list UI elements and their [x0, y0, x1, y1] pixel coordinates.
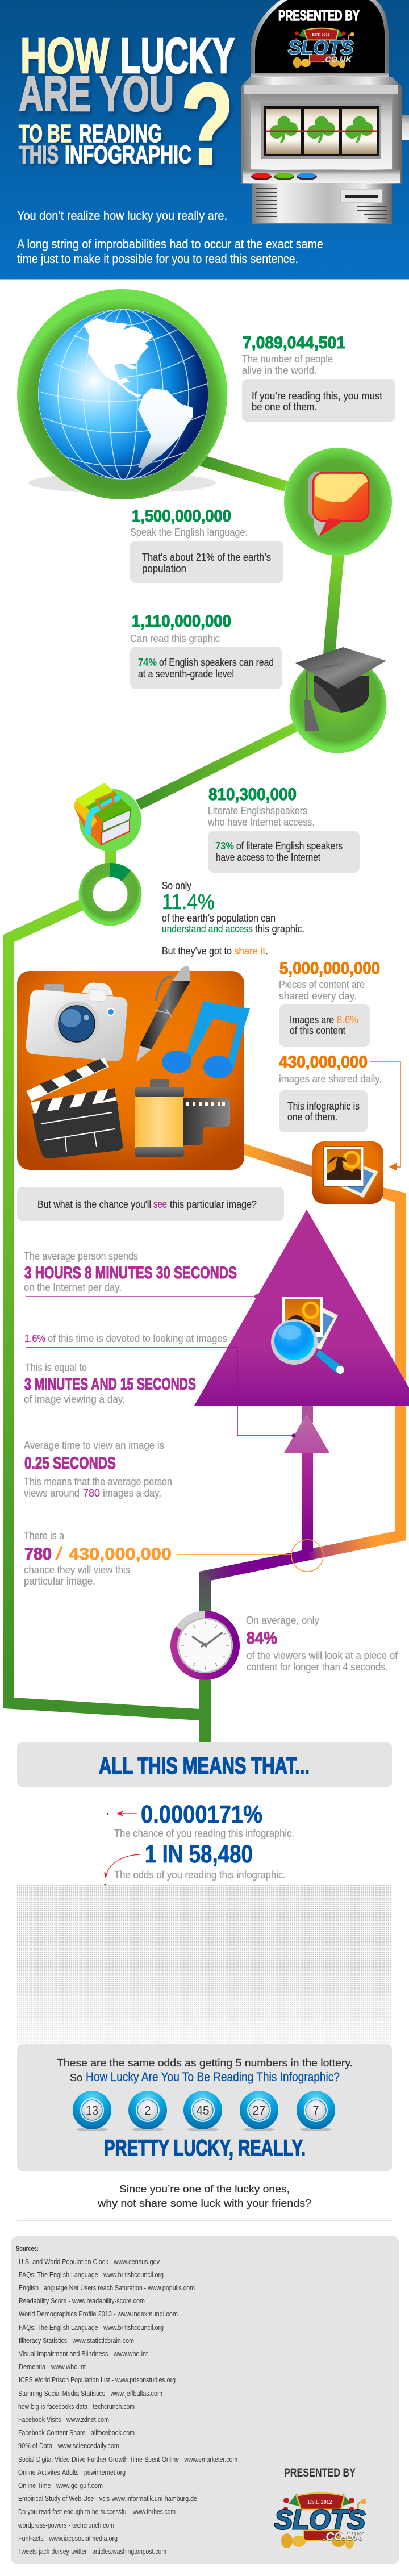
stat: image viewing time: 3 MINUTES AND 15 SECONDS	[24, 1375, 196, 1394]
panel: all this means that: ALL THIS MEANS THAT...	[99, 1752, 310, 1779]
stat: time online: on the Internet per day.	[24, 1282, 122, 1293]
intro text: A long string of improbabilities had to occur at the exact same	[17, 237, 323, 251]
lottery ball 2: 2	[144, 2103, 151, 2118]
sources list: Readability Score - www.readability-score.com	[19, 2296, 145, 2305]
stat: odds: The odds of you reading this infographic.	[114, 1869, 286, 1881]
icon: slots logo footer	[274, 2493, 366, 2549]
title: READING	[79, 120, 162, 148]
stat: 11.4 percent: this graphic.	[255, 923, 304, 935]
sources list: wordpress-powers - techcrunch.com	[18, 2521, 114, 2529]
callout: 74 percent: 74%	[138, 657, 157, 668]
panel: lottery comparison: These are the same odds as getting 5 numbers in the lottery.	[57, 2057, 353, 2069]
callout: images 8.6 percent: Images are	[290, 1014, 334, 1026]
callout: this infographic	[279, 1090, 368, 1132]
orange path: right side down	[383, 1187, 406, 1540]
title: ?	[181, 59, 234, 189]
icon: stack of books	[74, 783, 141, 851]
clover reel 1	[270, 116, 298, 143]
sources list: Online-Activites-Adults - pewinternet.org	[18, 2468, 126, 2477]
closing text: Since you’re one of the lucky ones,	[119, 2183, 290, 2195]
callout: one of them: If you’re reading this, you must	[252, 390, 382, 402]
icon: slots logo footer: SLOTS	[274, 2505, 365, 2535]
panel: lottery comparison: PRETTY LUCKY, REALLY.	[104, 2136, 306, 2161]
donut chart: clock 84 percent	[170, 1611, 240, 1680]
handle	[402, 115, 409, 140]
stat: chance percentage	[114, 1800, 294, 1839]
stat: english speakers	[130, 507, 248, 538]
stat: average view time: 780	[83, 1487, 100, 1499]
stat: shared content: shared every day.	[279, 990, 357, 1002]
lottery ball 13: 13	[86, 2103, 98, 2118]
callout: 21 percent	[130, 541, 283, 583]
sources list: Online Time - www.go-gulf.com	[18, 2481, 103, 2490]
panel: sources	[11, 2236, 399, 2564]
stat: can read graphic: Can read this graphic	[130, 633, 220, 644]
stat: 780 over 430,000,000: 780	[24, 1545, 52, 1564]
stat: world population: 7,089,044,501	[243, 334, 345, 352]
panel: lottery comparison: So	[70, 2072, 82, 2083]
lottery ball 27: 27	[252, 2103, 266, 2118]
orange and purple path: across	[199, 1531, 406, 1581]
buttons	[251, 173, 317, 180]
icon: graduation cap	[290, 647, 386, 753]
arrow: curved to dot	[104, 1854, 140, 1886]
callout: 21 percent: population	[142, 563, 186, 574]
stat: image viewing time: This is equal to	[25, 1362, 87, 1373]
path: down to clock	[199, 1572, 211, 1614]
lottery ball 2	[128, 2091, 167, 2131]
sources list	[18, 2257, 237, 2556]
stat: average view time: This means that the average person	[24, 1476, 172, 1487]
stat: 780 over 430,000,000: 430,000,000	[69, 1545, 172, 1564]
purple arrow: triangle and stem	[194, 1210, 409, 1552]
stat: 84 percent: 84%	[247, 1629, 277, 1648]
stat: 11.4 percent: share it	[234, 945, 265, 957]
sources list: Stunning Social Media Statistics - www.jeffbullas.com	[18, 2389, 162, 2398]
callout: 74 percent: at a seventh-grade level	[138, 668, 234, 680]
stat: 780 over 430,000,000: chance they will view this	[24, 1564, 130, 1575]
sources list: 90% of Data - www.sciencedaily.com	[18, 2441, 119, 2450]
sources list: ICPS World Prison Population List - www.prisonstudies.org	[19, 2375, 176, 2384]
icon: pen	[136, 966, 190, 1062]
icon: slots logo: .CO.UK	[323, 55, 352, 64]
presented by footer label: PRESENTED BY	[284, 2466, 356, 2479]
arrow: images to icon	[370, 1061, 400, 1170]
stat: shared content	[279, 959, 380, 1002]
green path: trunk to summary box	[199, 1676, 211, 1743]
callout: chance of seeing image: But what is the chance you'll	[37, 1199, 151, 1210]
sources list: Social-Digital-Video-Drive-Further-Growth-Time-Spent-Online - www.emarketer.com	[18, 2455, 237, 2464]
orange path: media panel to image icon	[244, 1144, 312, 1177]
title: TO BE	[19, 120, 72, 148]
lottery ball 45: 45	[197, 2103, 209, 2118]
stat: time online	[24, 1251, 237, 1293]
lottery ball 7	[297, 2091, 335, 2131]
stat: odds: 1 IN 58,480	[145, 1840, 253, 1868]
stat: 11.4 percent: But they've got to	[162, 945, 232, 957]
sources list: Empirical Study of Web Use - vsis-www.informatik.uni-hamburg.de	[18, 2494, 197, 2503]
callout: 74 percent: of English speakers can read	[159, 657, 274, 668]
intro text	[17, 209, 323, 266]
callout: 73 percent: 73%	[215, 840, 234, 852]
sources list: Visual Impairment and Blindness - www.who.int	[19, 2349, 148, 2358]
stat: 11.4 percent: .	[265, 945, 268, 957]
title: THIS	[19, 141, 59, 169]
stat: 780 over 430,000,000: There is a	[24, 1530, 65, 1541]
sources list: Do-you-read-fast-enough-to-be-successful - www.forbes.com	[18, 2507, 176, 2516]
stat: time online: The average person spends	[24, 1251, 138, 1262]
stat: average view time: views around	[24, 1487, 80, 1499]
panel: lottery comparison	[17, 2044, 392, 2171]
sources list: Illiteracy Statistics - www.statisticbrain.com	[19, 2336, 134, 2345]
stat: internet access: who have Internet access.	[207, 816, 315, 828]
callout: one of them: be one of them.	[252, 401, 317, 412]
callout: one of them	[242, 379, 395, 422]
connector: image viewing	[26, 1348, 295, 1437]
stat: percent of time on images: 1.6%	[24, 1333, 45, 1344]
sources list: World Demographics Profile 2013 - www.indexmundi.com	[19, 2310, 178, 2318]
stat: images shared	[279, 1053, 382, 1085]
stat: chance percentage: The chance of you reading this infographic.	[114, 1828, 294, 1839]
sources list: Facebook Visits - www.zdnet.com	[18, 2415, 109, 2424]
sources list: U.S. and World Population Clock - www.census.gov	[19, 2257, 160, 2266]
sources list: Facebook Content Share - allfacebook.com	[18, 2428, 135, 2437]
stat: images shared: images are shared daily.	[279, 1073, 382, 1085]
stat: image viewing time	[24, 1362, 196, 1405]
stat: chance percentage: 0.0000171%	[141, 1800, 262, 1828]
stat: average view time: Average time to view an image is	[24, 1440, 164, 1451]
stat: internet access: Literate Englishspeakers	[208, 805, 307, 816]
icon: film roll	[135, 1079, 230, 1157]
stat: can read graphic	[130, 612, 231, 644]
callout: images 8.6 percent: of this content	[290, 1025, 345, 1036]
stat: shared content: Pieces of content are	[279, 979, 365, 990]
stat: average view time: 0.25 SECONDS	[24, 1454, 116, 1473]
clover reel 3	[345, 116, 373, 143]
icon: magnifier over photo	[271, 1297, 344, 1374]
title: ARE YOU	[19, 66, 174, 122]
sources list: how-big-is-facebooks-data - techcrunch.com	[18, 2402, 135, 2411]
icon: slot machine	[241, 0, 409, 224]
sources list: FAQs: The English Language - www.britishcouncil.org	[19, 2270, 164, 2279]
stat: 11.4 percent: So only	[162, 880, 191, 891]
panel: all this means that	[17, 1742, 392, 1787]
lottery ball 7: 7	[312, 2103, 319, 2118]
callout line and ring	[177, 1540, 323, 1572]
title: LUCKY	[120, 28, 235, 84]
icon: slots logo: SLOTS	[288, 37, 353, 59]
callout: 73 percent	[208, 831, 360, 873]
header panel	[0, 0, 409, 280]
stat: 11.4 percent: 11.4%	[162, 890, 215, 914]
stat: can read graphic: 1,110,000,000	[132, 612, 231, 631]
intro text: You don’t realize how lucky you really are.	[17, 209, 227, 223]
stat: 11.4 percent: understand and access	[162, 923, 253, 935]
stat: time online: 3 HOURS 8 MINUTES 30 SECONDS	[24, 1264, 237, 1282]
stat: 84 percent: On average, only	[246, 1615, 319, 1626]
stat: 84 percent: content for longer than 4 seconds.	[247, 1661, 388, 1673]
panel: shared media icons	[17, 966, 250, 1170]
stat: images shared: 430,000,000	[279, 1053, 368, 1072]
panel: lottery comparison: How Lucky Are You To Be Reading This Infographic?	[86, 2070, 340, 2084]
stat: 780 over 430,000,000	[24, 1530, 172, 1587]
icon: music note	[162, 1001, 250, 1078]
stat: internet access	[207, 785, 315, 828]
callout: 73 percent: have access to the Internet	[216, 852, 320, 863]
sources list: English Language Net Users reach Saturation - www.populis.com	[19, 2283, 195, 2292]
callout: chance of seeing image: this particular image?	[170, 1199, 257, 1210]
callout: this infographic: This infographic is	[287, 1101, 360, 1112]
icon: clapperboard	[26, 1058, 123, 1158]
icon: globe	[17, 289, 227, 499]
stat: 11.4 percent	[162, 880, 304, 957]
lottery ball 13	[73, 2091, 111, 2131]
callout: images 8.6 percent	[279, 1004, 370, 1047]
callout: this infographic: one of them.	[287, 1111, 337, 1123]
stat: internet access: 810,300,000	[208, 785, 297, 804]
stat: 780 over 430,000,000: /	[55, 1543, 63, 1564]
green path: left trunk	[3, 899, 199, 1720]
sources heading: Sources:	[16, 2244, 39, 2253]
sources list: Tweets-jack-dorsey-twitter - articles.washingtonpost.com	[18, 2547, 166, 2556]
icon: slots logo footer: .CO.UK	[323, 2531, 364, 2543]
sources list: FunFacts - www.iacpsocialmedia.org	[18, 2534, 118, 2542]
stat: 780 over 430,000,000: particular image.	[24, 1575, 95, 1587]
closing text	[97, 2183, 311, 2209]
intro text: time just to make it possible for you to read this sentence.	[17, 252, 298, 266]
stat: percent of time on images: of this time is devoted to looking at images	[48, 1333, 227, 1344]
stat: average view time	[24, 1440, 172, 1499]
stat: average view time: images a day.	[103, 1487, 161, 1499]
donut chart: 11.4 percent	[78, 862, 142, 926]
stat: 84 percent: of the viewers will look at a piece of	[247, 1650, 398, 1661]
icon: slots logo: EST. 2012	[312, 32, 330, 37]
closing text: why not share some luck with your friends?	[97, 2198, 311, 2209]
icon: camera	[25, 982, 128, 1062]
green path: globe to speech bubble	[199, 456, 288, 491]
dot field: one in 58,480	[17, 1885, 391, 2044]
stat: world population: alive in the world.	[242, 365, 317, 376]
stat: world population: The number of people	[242, 353, 333, 365]
callout: images 8.6 percent: 8.6%	[337, 1014, 358, 1026]
green path: speech bubble to cap	[323, 554, 344, 653]
presented by label: PRESENTED BY	[278, 8, 360, 24]
connector: time online	[26, 1294, 259, 1299]
stat: world population	[242, 334, 345, 376]
stat: 84 percent	[246, 1615, 398, 1673]
lottery ball 27	[240, 2091, 278, 2131]
icon: speech bubble	[284, 448, 392, 556]
arrow: to tiny dot	[107, 1811, 137, 1816]
stat: odds	[114, 1840, 286, 1881]
callout: 74 percent	[130, 647, 282, 689]
icon: slots logo footer: EST. 2012	[307, 2499, 332, 2506]
callout: chance of seeing image: see	[153, 1198, 167, 1211]
stat: english speakers: Speak the English language.	[130, 527, 248, 538]
sources list: FAQs: The English Language - www.britishcouncil.org	[19, 2323, 164, 2332]
green path: books to ring	[105, 849, 116, 864]
stat: english speakers: 1,500,000,000	[132, 507, 231, 526]
sources list: Dementia - www.who.int	[19, 2362, 86, 2371]
stat: image viewing time: of image viewing a day.	[24, 1394, 125, 1405]
green path: cap to books	[136, 723, 297, 810]
lottery ball 45	[183, 2091, 222, 2131]
stat: 11.4 percent: of the earth’s population can	[162, 912, 276, 924]
title	[19, 28, 235, 189]
icon: photo	[312, 1141, 383, 1204]
icon: slots logo	[288, 28, 354, 68]
stat: shared content: 5,000,000,000	[279, 959, 380, 978]
callout: chance of seeing image	[17, 1187, 284, 1221]
clover reel 2	[307, 116, 335, 143]
callout: 21 percent: That’s about 21% of the earth’s	[142, 552, 271, 563]
title: INFOGRAPHIC	[65, 141, 191, 169]
callout: 73 percent: of literate English speakers	[236, 840, 343, 852]
title: HOW	[20, 28, 110, 84]
